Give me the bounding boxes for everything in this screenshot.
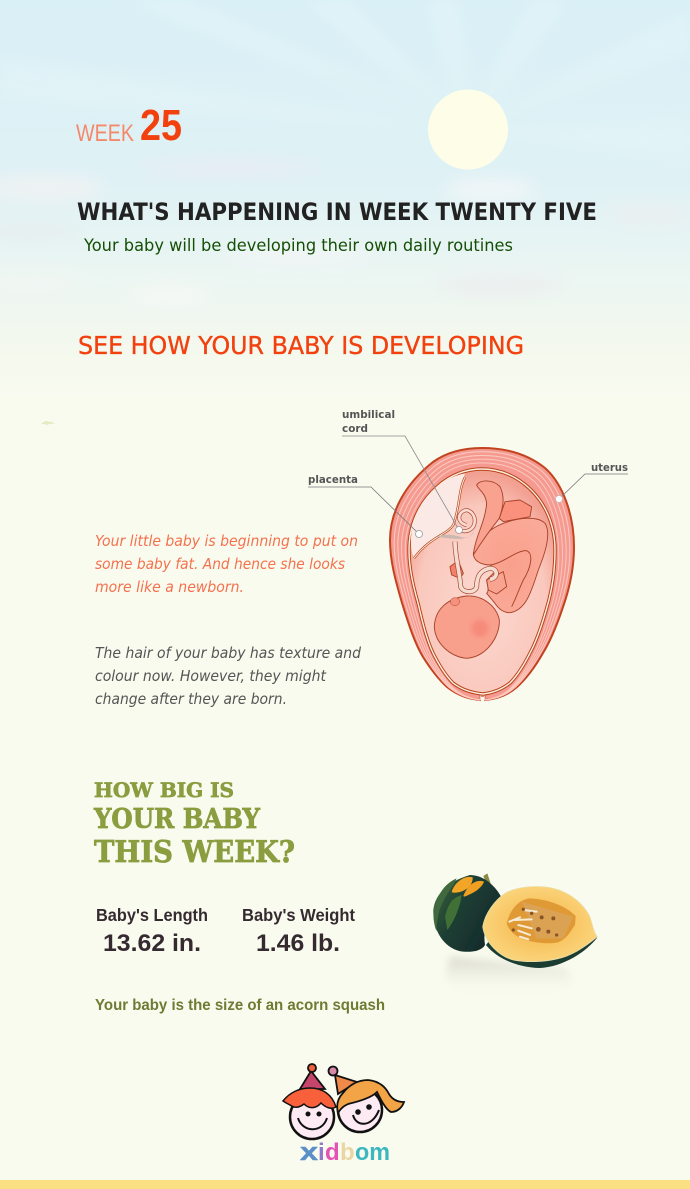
second foot (499, 500, 532, 522)
label: umbilical cord: umbilical (342, 409, 395, 421)
uterus wall (390, 448, 574, 700)
umbilical cord (455, 510, 496, 592)
week label: WEEK (76, 120, 134, 147)
heading: how big is your baby this week (93, 778, 295, 870)
label: uterus: uterus (591, 462, 628, 474)
fetus body (434, 481, 548, 658)
amniotic sac (409, 469, 555, 694)
paragraph: baby fat: more like a newborn. (95, 578, 244, 596)
heading: how big is your baby this week: HOW BIG IS (94, 778, 234, 802)
cut half: rind (486, 935, 597, 968)
stat: baby's length (96, 905, 208, 957)
paragraph: baby fat: some baby fat. And hence she looks (95, 555, 345, 573)
wordmark: i (318, 1139, 325, 1166)
reflection (445, 957, 573, 997)
footer bar (0, 1180, 690, 1189)
paragraph: hair: colour now. However, they might (95, 667, 327, 685)
wordmark: d (325, 1139, 340, 1166)
paragraph: baby fat: Your little baby is beginning to put on (95, 532, 358, 550)
raised leg (473, 481, 503, 555)
party hat left (300, 1064, 325, 1089)
heading: what's happening: WHAT'S HAPPENING IN WEEK TWENTY FIVE (77, 198, 597, 226)
stat: baby's weight (242, 905, 355, 957)
label: umbilical cord (342, 409, 462, 534)
size comparison text: Your baby is the size of an acorn squash (95, 997, 385, 1014)
faces (306, 1104, 372, 1116)
torso (473, 518, 548, 613)
week label (76, 101, 182, 150)
cut half: flesh (483, 887, 597, 962)
cavity (507, 898, 576, 943)
face left (290, 1095, 334, 1139)
placenta (411, 473, 465, 558)
paragraph: baby fat (95, 532, 358, 596)
red hair (283, 1088, 336, 1108)
stat: baby's length: Baby's Length (96, 905, 208, 925)
wordmark: b (340, 1139, 355, 1166)
face right (338, 1088, 382, 1132)
orange hair (337, 1080, 404, 1113)
paragraph: hair: change after they are born. (95, 690, 287, 708)
lower foot (487, 572, 507, 594)
logo: kidbom (283, 1064, 404, 1166)
stat: baby's weight: 1.46 lb. (256, 930, 340, 957)
whole squash (433, 875, 503, 952)
heading: see how your baby is developing: SEE HOW YOUR BABY IS DEVELOPING (78, 331, 524, 360)
bird (41, 421, 55, 425)
seeds (509, 910, 537, 939)
wordmark: om (355, 1139, 390, 1166)
heading: how big is your baby this week: YOUR BABY (93, 804, 261, 835)
week label: 25 (140, 101, 182, 150)
label: umbilical cord: cord (342, 423, 368, 435)
sun (428, 90, 508, 170)
subheading: Your baby will be developing their own daily routines (83, 236, 513, 255)
wordmark (300, 1139, 390, 1166)
label: uterus (556, 462, 628, 502)
stem (483, 873, 491, 884)
stat: baby's length: 13.62 in. (103, 930, 201, 957)
wordmark: x (300, 1139, 319, 1166)
label: placenta (308, 474, 422, 538)
head (434, 596, 499, 658)
paragraph: hair: The hair of your baby has texture and (95, 644, 361, 662)
paragraph: hair (95, 644, 361, 708)
diagram: uterus with fetus (308, 409, 628, 700)
icon: acorn squash (433, 873, 597, 997)
party hat right (328, 1066, 357, 1094)
thigh (490, 551, 531, 607)
heading: how big is your baby this week: THIS WEEK? (94, 835, 295, 870)
stat: baby's weight: Baby's Weight (242, 905, 355, 925)
hand (450, 561, 463, 578)
label: placenta: placenta (308, 474, 358, 486)
